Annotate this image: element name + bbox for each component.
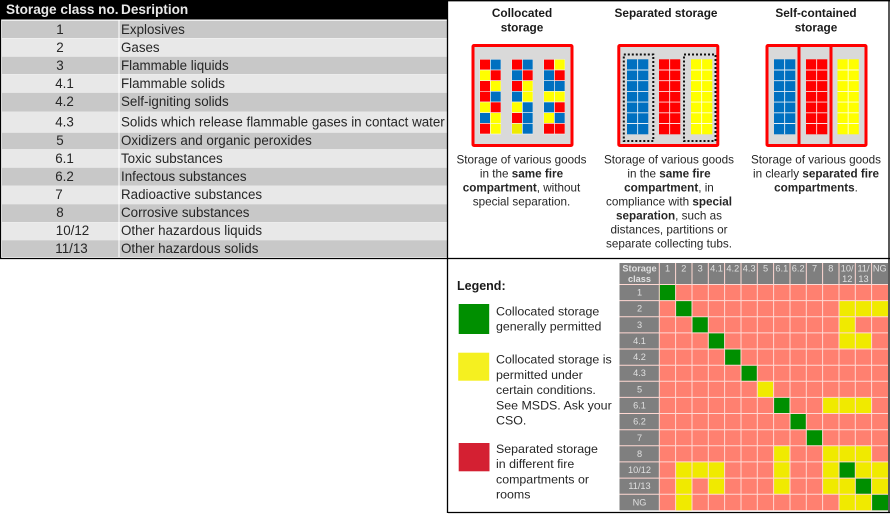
yellow goods <box>691 59 712 134</box>
text: self-contained description: Storage of various goods <box>751 153 881 166</box>
matrix green cells <box>659 284 888 510</box>
storage class descriptions: Gases <box>121 40 160 55</box>
diagram: collocated storage <box>473 46 572 146</box>
text: separated description: separation, such as <box>616 209 722 222</box>
matrix column headers: NG <box>873 264 887 274</box>
legend item: green <box>459 304 601 334</box>
matrix column headers: 5 <box>763 264 768 274</box>
blue compartment goods <box>774 59 795 134</box>
matrix column headers: 1 <box>665 264 670 274</box>
matrix column headers: 7 <box>812 264 817 274</box>
storage class numbers: 6.2 <box>55 169 74 184</box>
matrix column headers: 12 <box>842 274 852 284</box>
matrix row labels <box>628 288 651 507</box>
storage class descriptions: Corrosive substances <box>121 205 250 220</box>
legend item: yellow: certain conditions. <box>496 383 596 397</box>
matrix column headers: class <box>628 274 651 284</box>
heading: collocated storage: storage <box>501 20 544 34</box>
chart: collocation matrix <box>620 263 888 510</box>
diagram: separated storage <box>619 46 718 146</box>
storage class descriptions: Infectous substances <box>121 169 247 184</box>
red compartment goods <box>806 59 827 134</box>
text: collocated description: special separation. <box>473 195 570 208</box>
storage class descriptions: Self-igniting solids <box>121 94 229 109</box>
legend item: yellow: See MSDS. Ask your <box>496 398 612 412</box>
storage class numbers: 5 <box>56 133 64 148</box>
text: separated description: separate collecting tubs. <box>606 237 732 250</box>
matrix column headers: 4.3 <box>743 264 756 274</box>
dotted separation right <box>684 54 716 141</box>
matrix yellow cells <box>676 301 888 510</box>
matrix row labels: 5 <box>637 384 642 394</box>
storage class descriptions: Flammable liquids <box>121 58 229 73</box>
text: separated description: compliance with special <box>606 195 732 208</box>
matrix column headers: 4.1 <box>710 264 723 274</box>
matrix column headers: 6.2 <box>792 264 805 274</box>
heading: self-contained storage: Self-contained <box>775 6 857 20</box>
text: separated description: distances, partitions or <box>611 223 728 236</box>
panel: collocated storage <box>457 6 587 208</box>
matrix row labels: 3 <box>637 320 642 330</box>
dotted separation left <box>624 54 653 141</box>
goods column 2 <box>512 59 533 134</box>
heading: separated storage: Separated storage <box>615 6 718 20</box>
storage class descriptions: Explosives <box>121 22 185 37</box>
storage class descriptions: Flammable solids <box>121 76 225 91</box>
yellow compartment goods <box>838 59 859 134</box>
matrix row labels: 11/13 <box>628 481 651 491</box>
legend heading: Legend: <box>457 279 506 293</box>
text: collocated description: in the same fire <box>480 167 563 180</box>
text: self-contained description: in clearly separated fire <box>753 167 879 180</box>
panel: separated storage <box>604 6 734 250</box>
storage class numbers: 8 <box>56 205 64 220</box>
matrix row labels: 1 <box>637 288 642 298</box>
storage class numbers: 6.1 <box>55 151 74 166</box>
table header: Storage class no. <box>6 2 119 17</box>
storage class descriptions: Other hazardous solids <box>121 241 259 256</box>
storage class numbers: 4.1 <box>55 76 74 91</box>
legend item: red: Separated storage <box>496 442 598 456</box>
legend item: yellow: permitted under <box>496 368 583 382</box>
blue goods <box>627 59 648 134</box>
matrix base cells <box>659 284 888 510</box>
diagram: self-contained storage <box>767 46 866 146</box>
storage class numbers <box>55 22 89 256</box>
storage class descriptions: Radioactive substances <box>121 187 262 202</box>
text: separated description: Storage of various goods <box>604 153 734 166</box>
table header: Desription <box>121 2 188 17</box>
panel: legend <box>457 279 612 502</box>
legend item: yellow <box>458 353 612 428</box>
legend item: yellow: Collocated storage is <box>496 353 612 367</box>
matrix row labels: 4.3 <box>633 368 646 378</box>
text: self-contained description: compartments. <box>774 181 858 194</box>
legend item: green: Collocated storage <box>496 304 599 318</box>
storage class numbers: 2 <box>56 40 64 55</box>
matrix column headers: 13 <box>858 274 869 284</box>
matrix row labels: 2 <box>637 304 642 314</box>
matrix row labels: 4.1 <box>633 336 646 346</box>
storage class descriptions: Solids which release flammable gases in contact water <box>121 114 445 130</box>
storage class numbers: 3 <box>56 58 64 73</box>
matrix row labels: NG <box>633 497 646 507</box>
legend item: green: generally permitted <box>496 320 601 334</box>
storage class descriptions: Oxidizers and organic peroxides <box>121 133 312 148</box>
table row backgrounds <box>2 21 447 257</box>
red goods <box>659 59 680 134</box>
storage class descriptions <box>121 22 445 256</box>
storage class descriptions: Toxic substances <box>121 151 223 166</box>
goods column 3 <box>544 59 565 134</box>
storage class numbers: 1 <box>56 22 64 37</box>
matrix row labels: 8 <box>637 449 642 459</box>
matrix grid lines <box>620 263 888 510</box>
panel: self-contained storage <box>751 6 881 194</box>
table header <box>0 0 448 20</box>
matrix column headers: 8 <box>828 264 833 274</box>
matrix column headers: 11/ <box>857 264 870 274</box>
legend item: red <box>459 442 598 502</box>
legend item: red: in different fire <box>496 457 574 471</box>
storage class numbers: 4.3 <box>55 114 74 130</box>
matrix row labels: 4.2 <box>633 352 646 362</box>
storage class numbers: 10/12 <box>56 223 89 238</box>
matrix column headers: 6.1 <box>775 264 788 274</box>
goods column 1 <box>480 59 501 134</box>
matrix row labels: 6.2 <box>633 417 646 427</box>
matrix column headers: 2 <box>681 264 686 274</box>
legend item: red: rooms <box>496 488 530 502</box>
text: separated description: compartment, in <box>624 181 714 194</box>
heading: self-contained storage: storage <box>795 20 838 34</box>
legend item: yellow: CSO. <box>496 414 526 428</box>
matrix header and label backgrounds <box>620 263 888 510</box>
legend item: red: compartments or <box>496 472 589 486</box>
panel: storage class table <box>0 0 448 257</box>
matrix row labels: 6.1 <box>633 400 646 410</box>
text: collocated description: compartment, without <box>463 181 580 194</box>
matrix column headers <box>622 264 887 284</box>
matrix row labels: 10/12 <box>628 465 651 475</box>
matrix column headers: 4.2 <box>726 264 739 274</box>
storage class numbers: 7 <box>55 187 63 202</box>
matrix column headers: Storage <box>622 264 657 274</box>
matrix column headers: 3 <box>698 264 703 274</box>
text: collocated description: Storage of various goods <box>457 153 587 166</box>
heading: collocated storage: Collocated <box>492 6 552 20</box>
storage class numbers: 4.2 <box>55 94 74 109</box>
matrix row labels: 7 <box>637 433 642 443</box>
matrix column headers: 10/ <box>841 264 854 274</box>
text: separated description: in the same fire <box>627 167 711 180</box>
storage class numbers: 11/13 <box>55 241 88 256</box>
storage class descriptions: Other hazardous liquids <box>121 223 262 238</box>
